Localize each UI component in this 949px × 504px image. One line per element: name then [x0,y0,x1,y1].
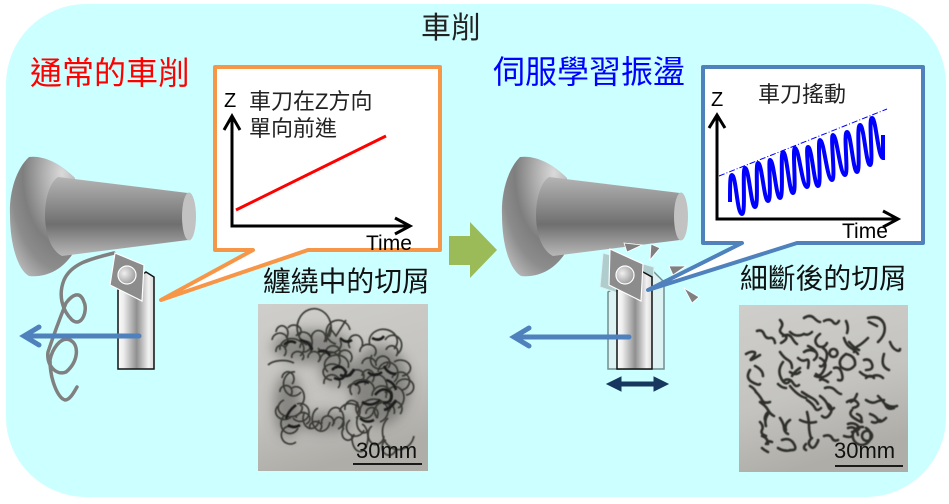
left callout [161,67,440,300]
workpiece cone [45,177,196,256]
callout text: 單向前進 [249,116,337,141]
caption: broken chips: 細斷後的切屑 [740,263,907,294]
feed arrow [514,328,629,346]
line chart: oscillating feed: Time [842,220,888,243]
right machine illustration [502,157,699,391]
callout box [161,67,440,300]
scale label: 30mm [834,438,895,463]
caption: tangled chips: 纏繞中的切屑 [263,266,430,297]
line chart: straight feed [224,90,412,255]
line chart: oscillating feed [709,89,898,243]
photo: tangled chips [258,304,428,471]
oscillation ghost holder [608,268,664,369]
title: 車削 [421,12,481,45]
heading: servo learning oscillation: 伺服學習振盪 [493,54,685,90]
callout box [648,67,923,290]
tool holder [617,272,652,369]
photo: broken chips [739,305,908,472]
callout text: 車刀搖動 [758,82,846,107]
oscillation double arrow [607,377,668,391]
line chart: straight feed: Time [366,232,412,255]
spindle chuck [10,157,75,276]
workpiece cone [536,177,688,256]
scale label: 30mm [356,438,417,463]
line chart: oscillating feed: Z [711,89,723,111]
cutting insert [609,249,643,301]
long tangled chip [48,253,114,400]
tool holder [118,272,154,369]
feed arrow [24,327,139,345]
right callout [648,67,923,290]
scale bar [353,463,422,465]
callout text: 車刀在Z方向 [249,89,372,114]
left machine illustration [10,157,196,400]
cutting insert [110,253,144,301]
spindle chuck [502,157,567,276]
heading: conventional turning: 通常的車削 [30,55,190,91]
process arrow [449,222,497,278]
oscillation ghost insert [600,253,654,301]
line chart: straight feed: Z [224,90,236,112]
broken chip fragments [624,243,699,303]
scale bar [835,465,903,467]
